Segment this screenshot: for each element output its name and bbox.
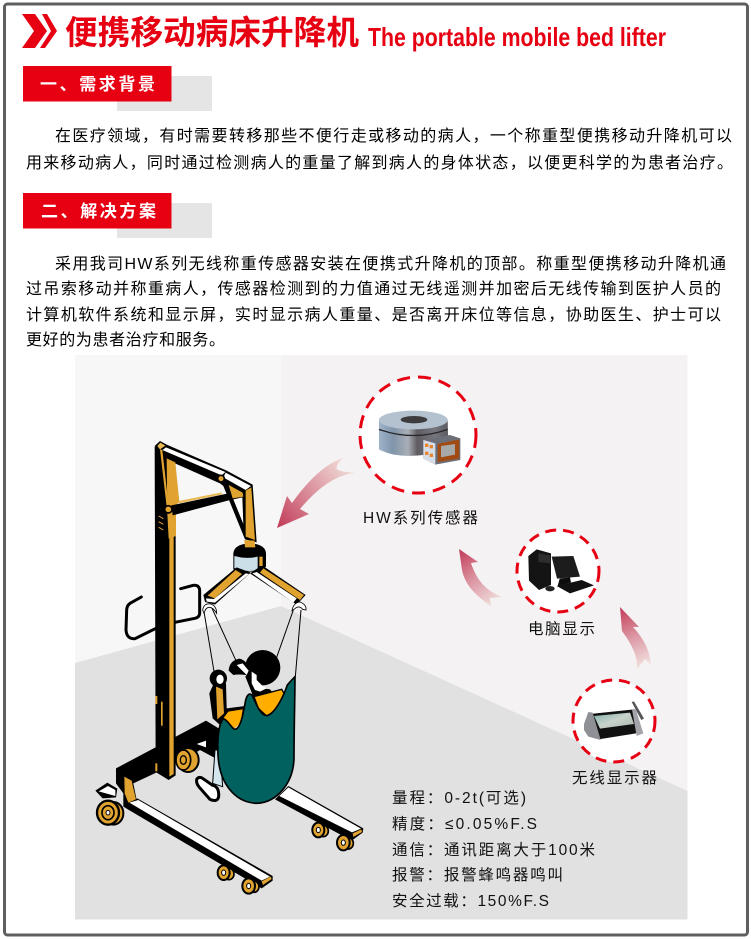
dashed ring <box>517 530 599 612</box>
text block: solution: 过吊索移动并称重病人，传感器检测到的力值通过无线遥测并加密后无线传输到医护人员的 <box>26 280 721 298</box>
heading: section two <box>23 193 212 238</box>
heading: section one: 一、需求背景 <box>40 75 155 94</box>
text block: solution: 采用我司HW系列无线称重传感器安装在便携式升降机的顶部。称重型便携移动升降机通 <box>55 255 726 273</box>
callout: computer display <box>517 530 599 638</box>
arrow: to lifter <box>277 458 355 528</box>
icon: desktop computer <box>528 549 594 593</box>
panel: illustration <box>75 355 688 920</box>
text block: solution: 计算机软件系统和显示屏，实时显示病人重量、是否离开床位等信息，协助医生、护士可以 <box>26 305 721 324</box>
text block: background <box>26 127 733 172</box>
text block: specifications: 量程：0-2t(可选) <box>392 789 526 807</box>
callout: computer display: 电脑显示 <box>528 620 595 638</box>
heading: section one <box>23 66 212 111</box>
hooks and ropes <box>203 602 306 677</box>
title <box>22 14 666 52</box>
dashed ring <box>360 377 476 493</box>
callout: sensor: HW系列传感器 <box>363 509 478 527</box>
text block: specifications: 精度：≤0.05%F.S <box>392 815 537 833</box>
lifting arms <box>203 567 306 605</box>
patient legs <box>197 750 223 801</box>
wheels <box>97 748 353 894</box>
title: The portable mobile bed lifter <box>368 22 666 52</box>
text block: specifications: 安全过载：150%F.S <box>392 892 549 910</box>
text block: solution: 更好的为患者治疗和服务。 <box>26 331 225 349</box>
mast <box>155 447 176 780</box>
patient in sling <box>197 650 295 803</box>
callout: wireless display <box>572 680 657 787</box>
text block: specifications <box>392 789 595 910</box>
icon: wireless display device <box>584 701 644 740</box>
lifter illustration <box>95 441 363 894</box>
callout: wireless display: 无线显示器 <box>572 769 657 787</box>
patient shirt <box>254 689 284 716</box>
handle <box>126 585 200 639</box>
arrow: to sensor <box>459 549 502 606</box>
text block: specifications: 报警：报警蜂鸣器鸣叫 <box>392 866 563 884</box>
patient head <box>229 650 280 697</box>
callout: sensor <box>360 377 478 527</box>
boom <box>155 441 257 542</box>
arrow: to computer <box>620 607 651 669</box>
sling <box>218 677 295 803</box>
dashed ring <box>573 680 655 762</box>
text block: specifications: 通信：通讯距离大于100米 <box>392 841 595 859</box>
heading: section two: 二、解决方案 <box>41 201 156 221</box>
title: 便携移动病床升降机 <box>65 14 359 51</box>
icon: double chevron <box>22 14 57 48</box>
icon: load cell sensor <box>379 411 460 465</box>
text block: solution <box>26 255 726 349</box>
base frame <box>95 721 363 888</box>
text block: background: 用来移动病人，同时通过检测病人的重量了解到病人的身体状态，以便更科学的为患者治疗。 <box>26 154 733 172</box>
load cell hub <box>233 540 266 572</box>
panel background <box>75 355 688 920</box>
text block: background: 在医疗领域，有时需要转移那些不便行走或移动的病人，一个称重型便携移动升降机可以 <box>55 127 732 145</box>
patient arms <box>209 670 245 728</box>
